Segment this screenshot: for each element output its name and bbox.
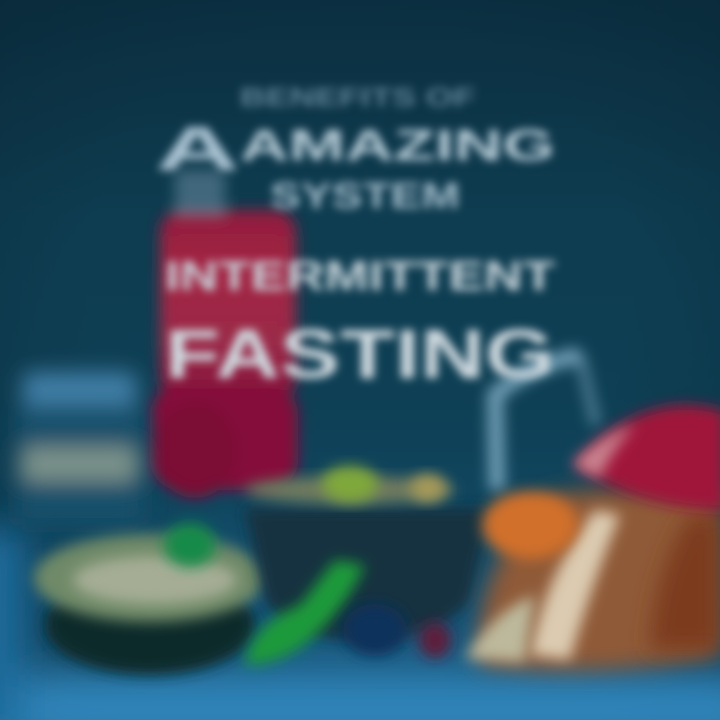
surface glow (0, 530, 720, 720)
heading line 3: SYSTEM (270, 175, 460, 216)
bowl center (245, 466, 490, 640)
water glass right (495, 355, 596, 490)
heading line 0: BENEFITS OF (240, 82, 475, 112)
water glass left (15, 372, 145, 525)
heading line 4: INTERMITTENT (165, 252, 555, 299)
fruit right (465, 405, 720, 671)
heading line 2: AMAZING (240, 121, 555, 170)
red bottle (150, 170, 298, 498)
green leaf (245, 560, 365, 665)
berries (343, 604, 451, 658)
bowl left (34, 523, 266, 675)
heading line 1: A (155, 115, 240, 184)
heading line 5: FASTING (165, 315, 555, 393)
heading text, blurred (155, 82, 555, 393)
